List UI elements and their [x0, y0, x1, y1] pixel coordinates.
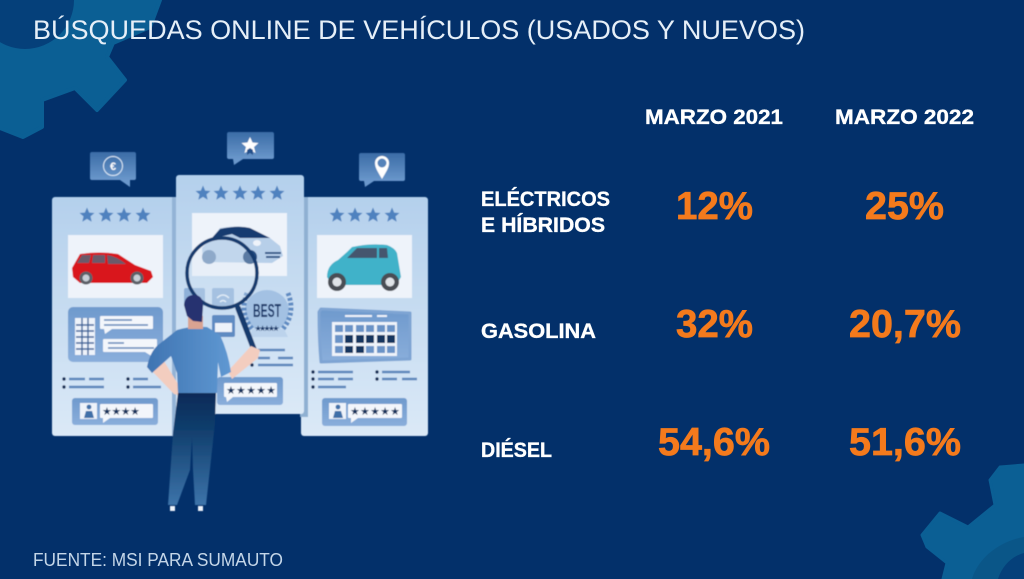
column heading: marzo 2021: MARZO 2021: [645, 106, 783, 129]
text lines: [311, 370, 417, 389]
speech bubble: euro: €: [110, 161, 116, 173]
row label: eléctricos e híbridos: E HÍBRIDOS: [481, 214, 605, 237]
person seen from behind: [147, 295, 260, 511]
badge: best: ★★★★★: [254, 324, 280, 333]
decorative gear: bottom right: [922, 465, 1024, 579]
info panel: phone and chat: [68, 307, 163, 362]
value: diésel 2022: 51,6%: [849, 421, 961, 464]
icon: magnifying glass: [187, 238, 257, 352]
row label: diésel: DIÉSEL: [481, 439, 552, 462]
panel: left card: [52, 197, 182, 436]
hair: [184, 295, 203, 322]
row label: gasolina: GASOLINA: [481, 320, 596, 343]
badge: best: [244, 290, 291, 337]
shirt: [147, 327, 231, 393]
panel: right card: [301, 197, 428, 436]
arm: hand on hip: [150, 361, 178, 395]
title: BÚSQUEDAS ONLINE DE VEHÍCULOS (USADOS Y NUEVOS): [33, 14, 805, 45]
illustration: car comparison: [52, 132, 428, 511]
trousers: [168, 393, 216, 505]
value: gasolina 2022: 20,7%: [849, 303, 961, 346]
rating stars: [80, 208, 150, 222]
rating panel: ★★★★: [102, 406, 140, 418]
rating stars: [330, 208, 400, 222]
panel: center card: [176, 175, 308, 417]
neck: [188, 316, 203, 329]
image box: red car: [68, 235, 163, 298]
source note: FUENTE: MSI PARA SUMAUTO: [33, 550, 283, 570]
value: diésel 2021: 54,6%: [658, 421, 770, 464]
speech bubble: location pin: [359, 153, 405, 187]
badge: best: BEST: [253, 301, 281, 321]
image box: car: [192, 213, 287, 276]
decorative gear: top left: [0, 0, 160, 137]
rating panel: [322, 398, 407, 426]
row label: eléctricos e híbridos: [481, 188, 610, 237]
value: eléctricos 2022: 25%: [865, 185, 944, 228]
rating stars: [196, 186, 284, 200]
speech bubble: euro: [90, 152, 136, 187]
text lines: [62, 377, 161, 389]
arm: holding magnifier: [228, 346, 260, 379]
value: eléctricos 2021: 12%: [676, 185, 753, 228]
shoes: [170, 506, 203, 511]
info panel: calendar: [319, 309, 410, 362]
rating panel: ★★★★★: [226, 385, 276, 397]
rating panel: [72, 398, 158, 425]
column heading: marzo 2022: MARZO 2022: [835, 106, 974, 129]
rating panel: [217, 377, 283, 405]
speech bubble: star: [227, 132, 274, 165]
value: gasolina 2021: 32%: [676, 303, 753, 346]
image box: teal car: [317, 235, 412, 298]
rating panel: ★★★★★: [350, 406, 400, 418]
small wifi and card tiles: [184, 288, 235, 337]
row label: eléctricos e híbridos: ELÉCTRICOS: [481, 188, 610, 211]
text lines: [250, 350, 293, 367]
